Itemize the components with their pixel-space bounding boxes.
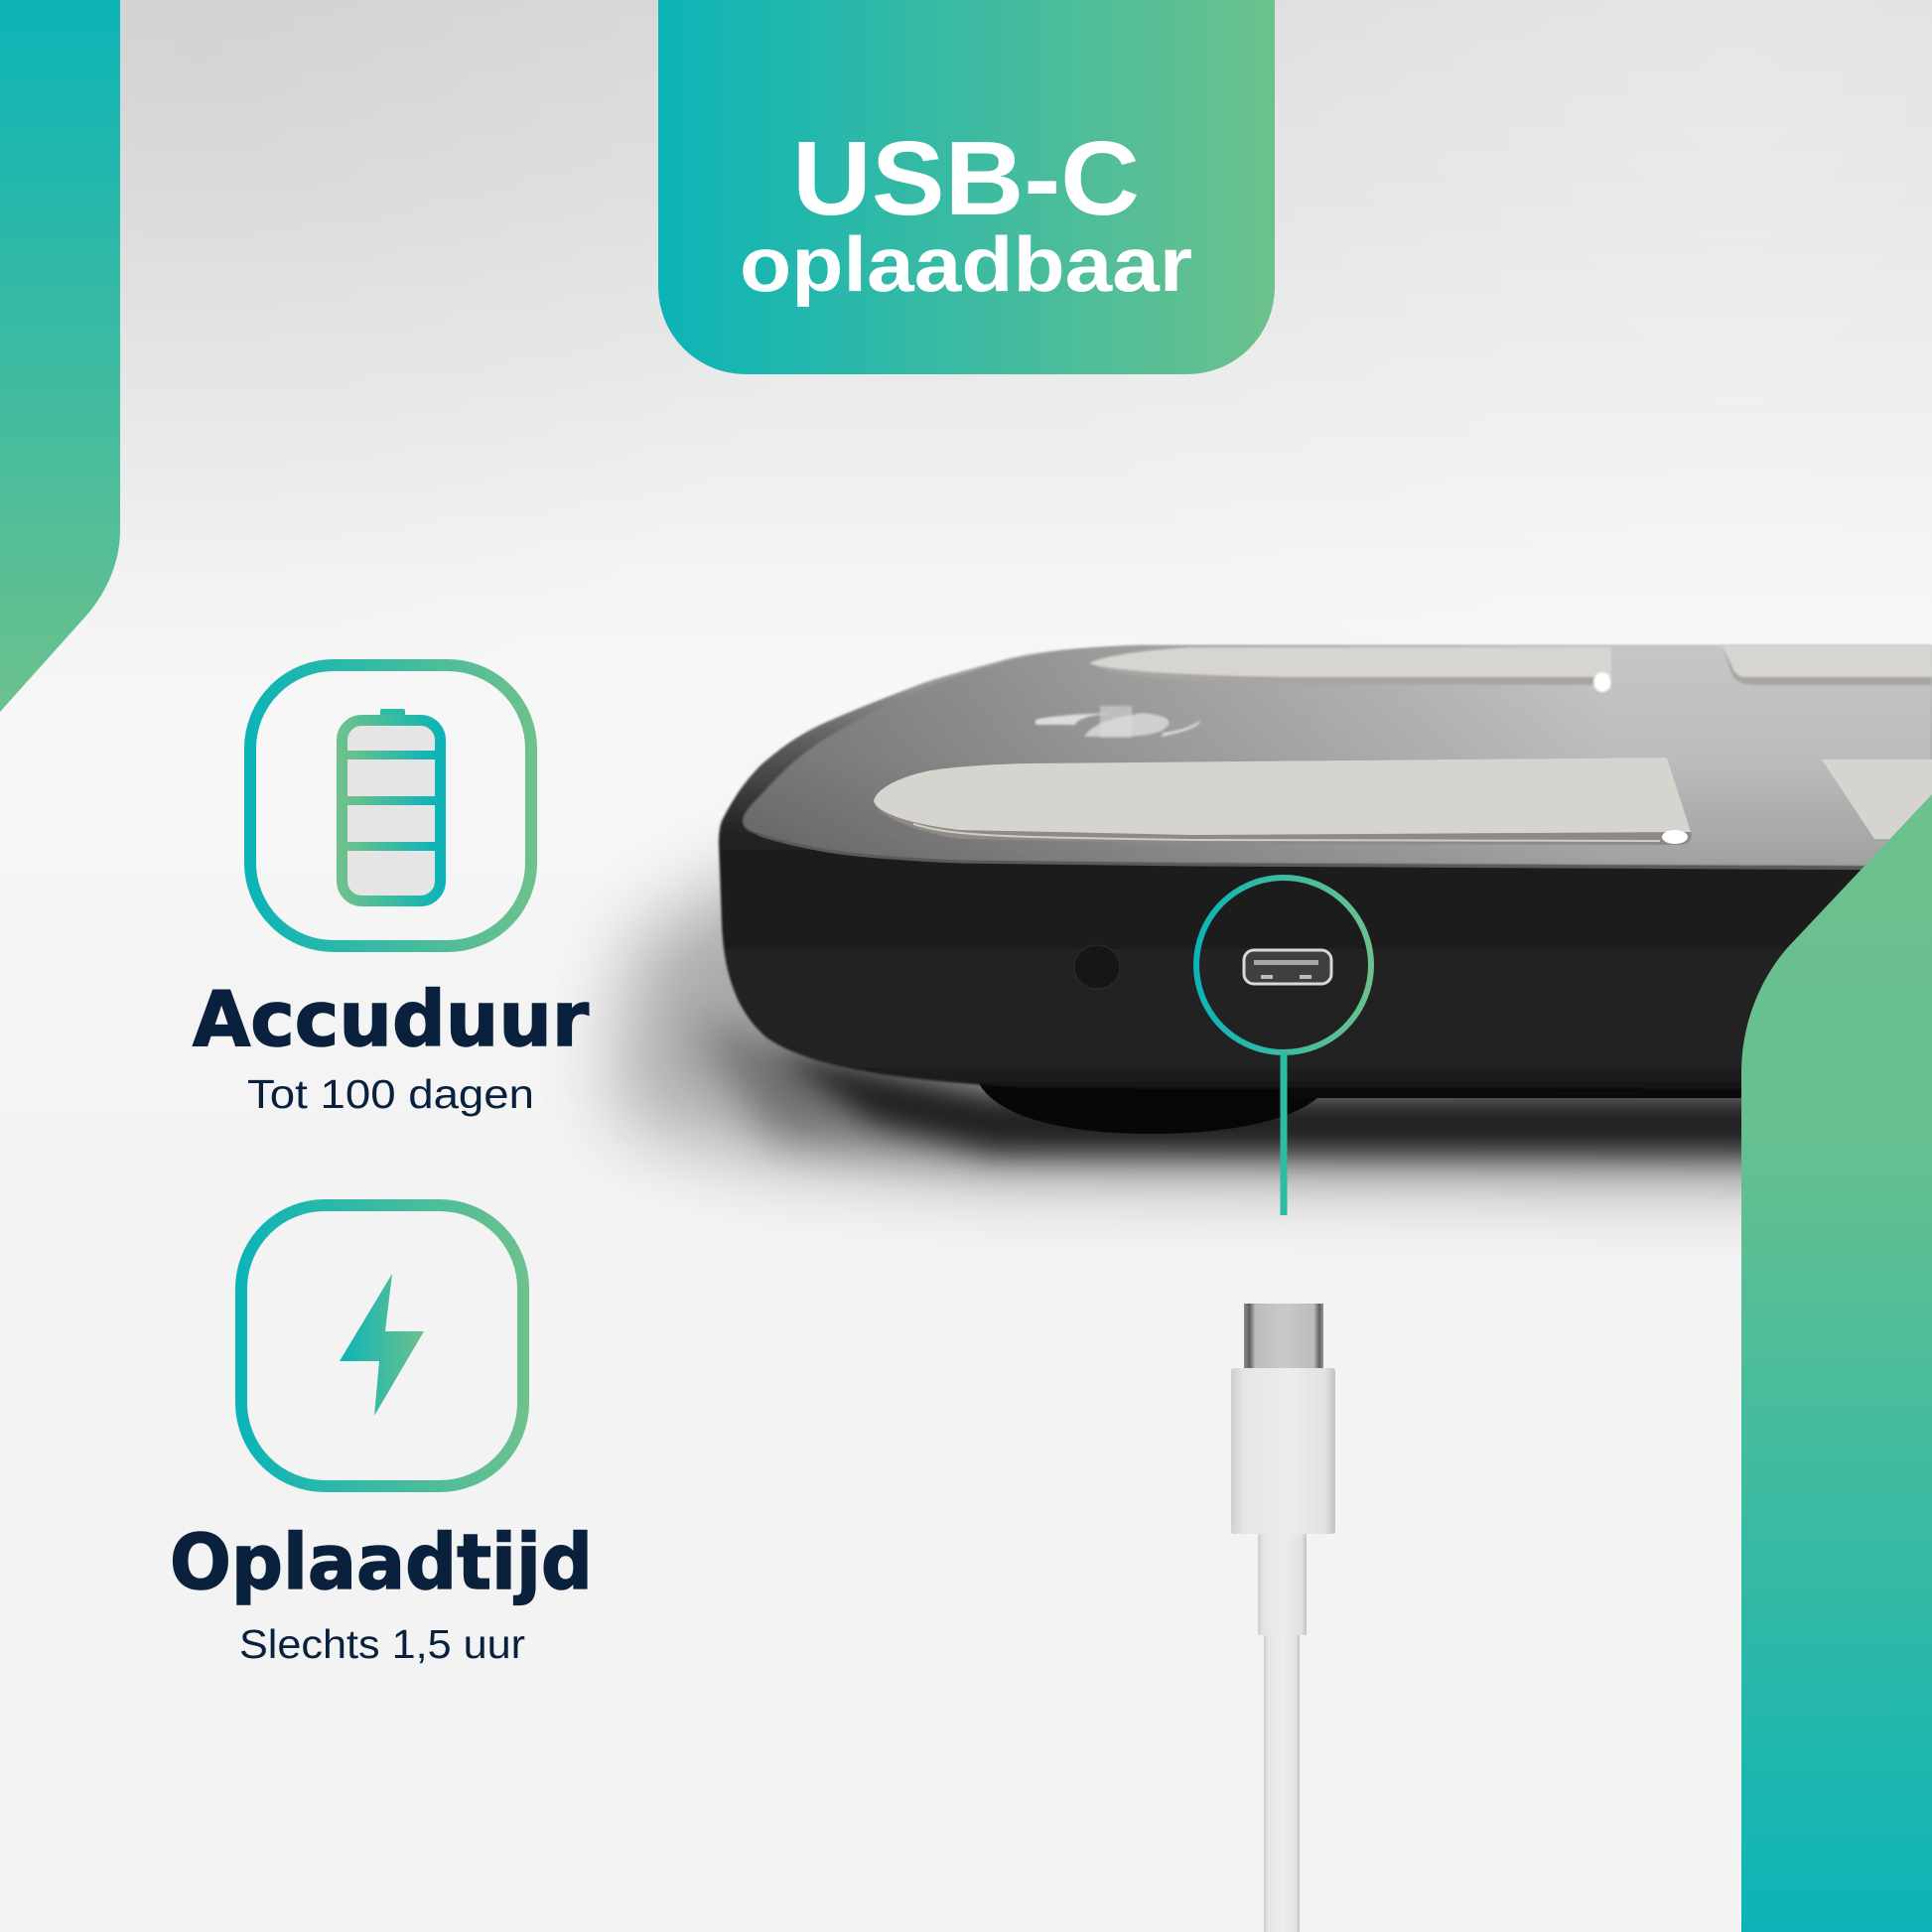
subtitle: oplaadbaar: oplaadbaar: [740, 220, 1192, 308]
cable wire: [1264, 1628, 1300, 1932]
brand logo: [1035, 706, 1200, 738]
front right metal pad: [1822, 759, 1932, 839]
title: USB-C: USB-C: [792, 120, 1140, 237]
back metal pad: [1089, 647, 1611, 685]
power button: [1074, 945, 1120, 989]
feature: battery life: [193, 665, 589, 1117]
left green strip: [0, 0, 120, 712]
connector boot: [1231, 1368, 1335, 1534]
icon: lightning bolt: [241, 1205, 523, 1486]
icon: battery: [250, 665, 531, 946]
scale top surface: [743, 645, 1932, 867]
callout line: [1281, 1052, 1287, 1215]
indicator light: [1593, 672, 1611, 692]
USB-C port: [1244, 950, 1331, 984]
connector metal: [1244, 1304, 1323, 1369]
port highlight circle: [1196, 878, 1371, 1052]
right green strip: [1741, 794, 1932, 1932]
scale foot: [975, 1072, 1330, 1134]
usb-c cable: [1231, 1304, 1335, 1932]
feature: charge time: [170, 1205, 593, 1667]
heading: Accuduur: Accuduur: [193, 976, 589, 1064]
front edge line: [758, 834, 1932, 869]
text: Slechts 1,5 uur: Slechts 1,5 uur: [239, 1621, 525, 1667]
back right metal pad: [1722, 645, 1932, 685]
strain relief: [1258, 1532, 1307, 1635]
title badge: [658, 0, 1275, 374]
scale shadow: [616, 874, 1932, 1186]
heading: Oplaadtijd: Oplaadtijd: [170, 1519, 593, 1607]
scale body: [719, 645, 1932, 1089]
scale product photo: [616, 645, 1932, 1186]
text: Tot 100 dagen: Tot 100 dagen: [247, 1071, 534, 1117]
front metal pad: [874, 758, 1691, 845]
